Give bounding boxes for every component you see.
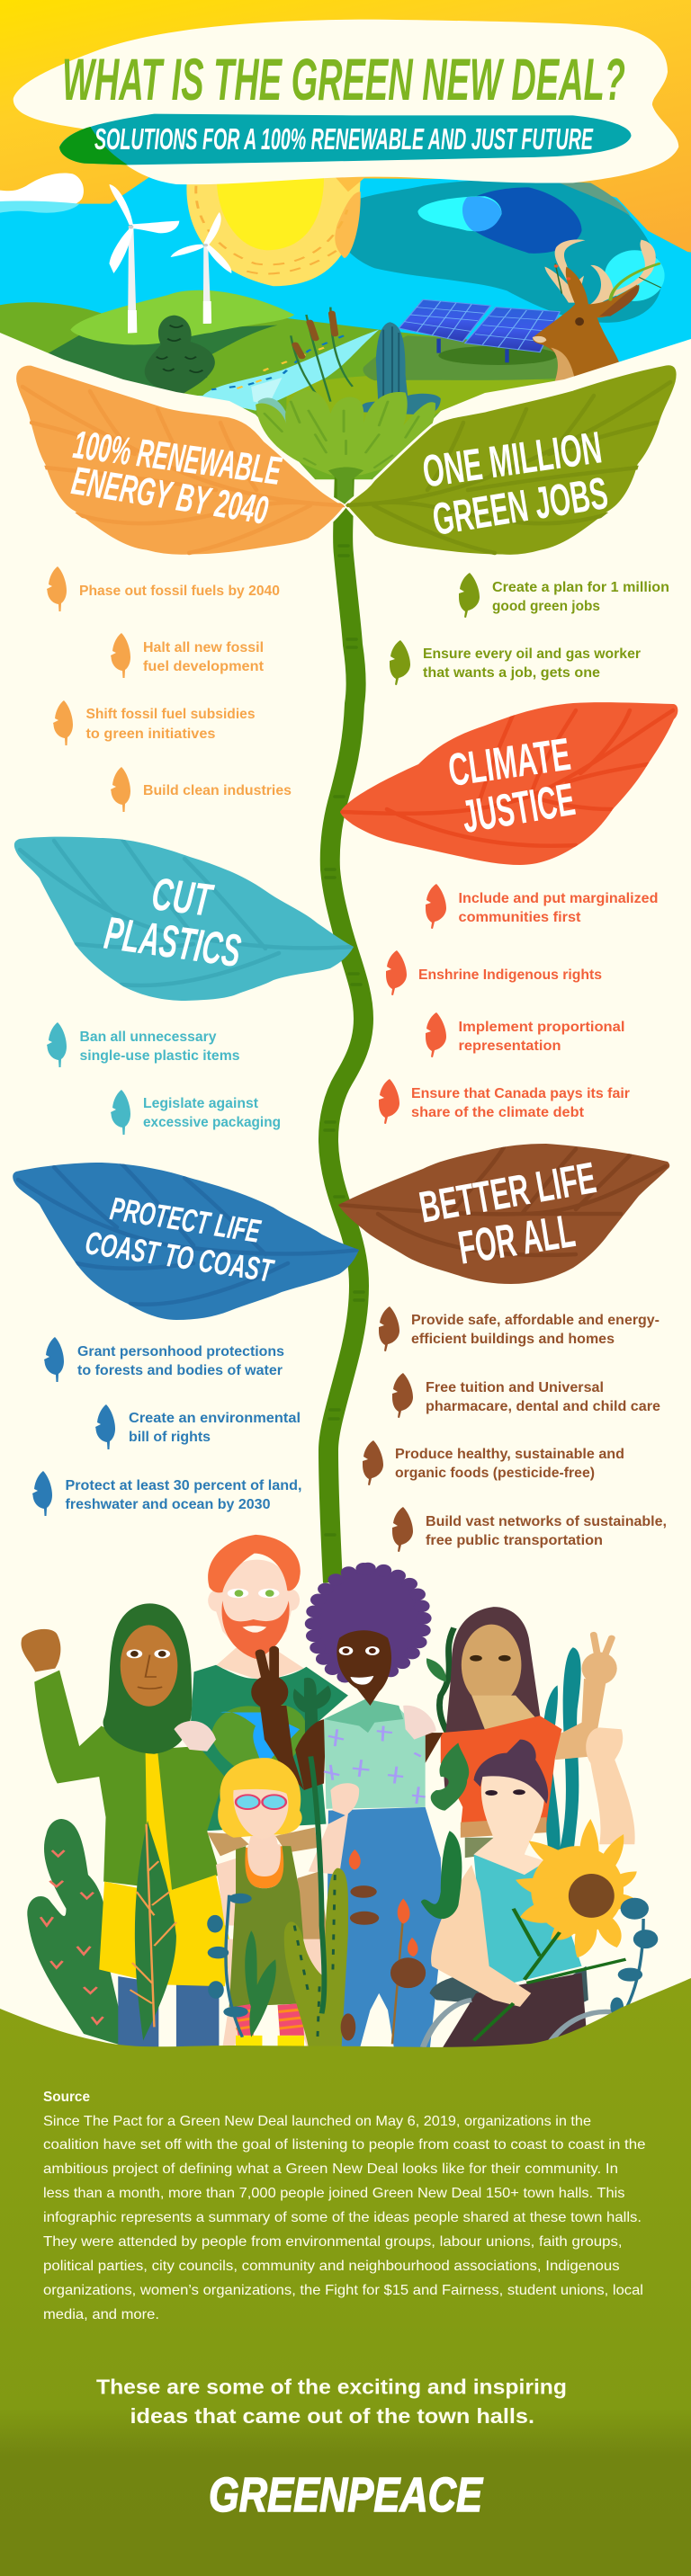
item: personhood protections: Grant personhood protections bbox=[77, 1344, 284, 1359]
people illustration bbox=[22, 1535, 658, 2051]
leaf: protect life coast to coast bbox=[13, 1163, 359, 1320]
item: shift subsidies: to green initiatives bbox=[86, 726, 216, 742]
item: plan for jobs bbox=[459, 573, 669, 618]
item: environmental bill of rights bbox=[95, 1404, 301, 1449]
item: tuition and pharmacare: Free tuition and Universal bbox=[426, 1380, 604, 1395]
heading: climate: CLIMATE bbox=[445, 728, 573, 796]
person: child with yellow hair bbox=[207, 1758, 359, 2051]
person: woman with purple afro bbox=[174, 1569, 443, 2051]
heading: energy by 2040: ENERGY BY 2040 bbox=[68, 459, 272, 533]
header illustration: sky, sun, hills, wind turbines, solar panels, deer bbox=[0, 0, 691, 479]
green field patch bbox=[363, 335, 569, 380]
cattails bbox=[291, 308, 353, 402]
source paragraph: coalition have set off with the goal of listening to people from coast to coast to coast in the bbox=[43, 2137, 646, 2153]
item: phase out fossil fuels: Phase out fossil fuels by 2040 bbox=[79, 584, 280, 599]
wind turbine 2 bbox=[171, 212, 231, 324]
item: buildings and homes: efficient buildings and homes bbox=[411, 1332, 615, 1347]
item: personhood protections: to forests and bodies of water bbox=[77, 1363, 283, 1378]
source paragraph bbox=[43, 2114, 646, 2322]
item: public transportation bbox=[392, 1507, 667, 1552]
item: public transportation: free public transportation bbox=[426, 1533, 603, 1548]
source paragraph: political parties, city councils, community and neighbourhood associations, Indigenous bbox=[43, 2259, 620, 2274]
item: organic foods bbox=[363, 1440, 624, 1485]
item: plan for jobs: Create a plan for 1 million bbox=[492, 580, 669, 595]
item: climate debt bbox=[379, 1079, 630, 1124]
list: renewable energy actions bbox=[47, 566, 292, 812]
item: phase out fossil fuels bbox=[47, 566, 280, 611]
heading: cut: CUT bbox=[149, 868, 217, 926]
teal cloud bbox=[337, 179, 661, 323]
list: better life actions bbox=[363, 1306, 667, 1552]
plant stem bbox=[325, 468, 363, 1582]
item: public transportation: Build vast networks of sustainable, bbox=[426, 1514, 667, 1529]
item: environmental bill of rights: bill of rights bbox=[129, 1430, 211, 1445]
item: protect 30 percent bbox=[32, 1471, 302, 1516]
source paragraph: They were attended by people from environmental groups, labour unions, faith groups, bbox=[43, 2234, 623, 2250]
item: oil and gas workers: that wants a job, gets one bbox=[423, 665, 600, 681]
item: clean industries: Build clean industries bbox=[143, 783, 292, 798]
source paragraph: less than a month, more than 7,000 people joined Green New Deal 150+ town halls. This bbox=[43, 2186, 625, 2201]
person: woman with long hair bbox=[441, 1607, 617, 1858]
closing statement bbox=[96, 2375, 567, 2428]
item: shift subsidies bbox=[53, 700, 256, 745]
list: cut plastics actions bbox=[47, 1022, 281, 1135]
list: green jobs actions bbox=[390, 573, 669, 685]
item: ban single-use: single-use plastic items bbox=[79, 1048, 239, 1064]
item: packaging: excessive packaging bbox=[143, 1115, 281, 1130]
closing statement: ideas that came out of the town halls. bbox=[130, 2404, 534, 2428]
leaf: 100% renewable energy bbox=[15, 364, 346, 556]
leaf: cut plastics bbox=[14, 837, 354, 1001]
item: environmental bill of rights: Create an environmental bbox=[129, 1411, 301, 1426]
heading: plastics: PLASTICS bbox=[102, 907, 244, 976]
item: buildings and homes bbox=[379, 1306, 660, 1351]
solar panels bbox=[399, 299, 560, 365]
source paragraph: media, and more. bbox=[43, 2307, 159, 2322]
subtitle banner bbox=[59, 114, 631, 165]
item: halt new fossil fuel: Halt all new fossil bbox=[143, 640, 264, 655]
cyan cloud bbox=[417, 196, 502, 231]
item: buildings and homes: Provide safe, affordable and energy- bbox=[411, 1313, 660, 1328]
lime field bbox=[286, 374, 564, 443]
wind turbine 1 bbox=[109, 184, 179, 334]
heading: 100% renewable: 100% RENEWABLE bbox=[71, 423, 284, 494]
leaf: better life for all bbox=[338, 1144, 669, 1284]
list: climate justice actions bbox=[379, 884, 659, 1124]
sunflower bbox=[474, 1819, 637, 2041]
item: oil and gas workers bbox=[390, 640, 641, 685]
cactus bbox=[361, 322, 441, 415]
item: protect 30 percent: Protect at least 30 percent of land, bbox=[65, 1478, 302, 1493]
source paragraph: organizations, women’s organizations, the Fight for $15 and Fairness, student unions, local bbox=[43, 2283, 643, 2298]
item: tuition and pharmacare bbox=[392, 1373, 660, 1418]
item: proportional representation: representation bbox=[459, 1038, 561, 1054]
item: packaging bbox=[111, 1090, 281, 1135]
item: ban single-use: Ban all unnecessary bbox=[79, 1030, 217, 1045]
flower bud bbox=[256, 389, 435, 504]
grey-green shade bbox=[555, 182, 630, 216]
item: marginalized communities: Include and put marginalized bbox=[459, 891, 659, 906]
plant: left cactus leaf bbox=[27, 1819, 128, 2047]
item: indigenous rights bbox=[386, 950, 602, 995]
deer bbox=[533, 239, 661, 387]
plant: climbing vine bbox=[426, 1627, 468, 1736]
item: proportional representation bbox=[426, 1012, 624, 1057]
base ground bbox=[0, 302, 617, 479]
Greenpeace logo: GREENPEACE bbox=[209, 2468, 484, 2522]
item: indigenous rights: Enshrine Indigenous rights bbox=[418, 967, 602, 983]
item: organic foods: organic foods (pesticide-free) bbox=[395, 1466, 595, 1481]
source text block bbox=[43, 2090, 646, 2322]
dark blue cloud bbox=[461, 187, 582, 254]
yellow sky background bbox=[0, 0, 691, 360]
person: man with red hair bbox=[190, 1535, 348, 1831]
item: climate debt: Ensure that Canada pays its fair bbox=[411, 1086, 630, 1101]
leaf: climate justice bbox=[340, 702, 678, 865]
person: woman in green hijab bbox=[22, 1603, 231, 2051]
item: proportional representation: Implement proportional bbox=[459, 1020, 624, 1035]
item: oil and gas workers: Ensure every oil and gas worker bbox=[423, 646, 641, 662]
item: tuition and pharmacare: pharmacare, dental and child care bbox=[426, 1399, 660, 1414]
list: protect life actions bbox=[32, 1337, 302, 1516]
source paragraph: ambitious project of defining what a Green New Deal looks like for their community. In bbox=[43, 2162, 618, 2177]
item: marginalized communities bbox=[426, 884, 659, 929]
blue sky bbox=[0, 177, 691, 389]
closing statement: These are some of the exciting and inspiring bbox=[96, 2375, 567, 2399]
plant: right blue sprig bbox=[610, 1898, 658, 2024]
plant: teal cacti bbox=[542, 1647, 581, 1858]
item: halt new fossil fuel: fuel development bbox=[143, 659, 264, 674]
cyan cloud by antlers bbox=[605, 250, 665, 301]
sun bbox=[186, 177, 366, 286]
river bbox=[185, 330, 379, 411]
green ground hill and footer background bbox=[0, 1978, 691, 2576]
item: climate debt: share of the climate debt bbox=[411, 1105, 584, 1120]
item: personhood protections bbox=[44, 1337, 284, 1382]
item: clean industries bbox=[111, 767, 292, 812]
item: packaging: Legislate against bbox=[143, 1096, 258, 1111]
item: ban single-use bbox=[47, 1022, 239, 1067]
item: plan for jobs: good green jobs bbox=[492, 599, 600, 614]
heading: coast to coast: COAST TO COAST bbox=[83, 1224, 277, 1289]
plant: cactus and sprigs foreground bbox=[130, 1743, 469, 2047]
leaf: one million green jobs bbox=[346, 364, 678, 556]
title blob bbox=[13, 20, 678, 184]
cream page area below the scene bbox=[0, 333, 691, 629]
source paragraph: infographic represents a summary of some of the ideas people shared at these town halls. bbox=[43, 2210, 642, 2225]
cloud overlap bbox=[462, 197, 501, 231]
person: woman in wheelchair bbox=[423, 1727, 635, 2051]
item: protect 30 percent: freshwater and ocean by 2030 bbox=[65, 1497, 270, 1512]
heading: protect life: PROTECT LIFE bbox=[108, 1190, 264, 1250]
left white cloud bbox=[0, 173, 84, 213]
item: shift subsidies: Shift fossil fuel subsidies bbox=[86, 707, 256, 722]
heading: for all: FOR ALL bbox=[455, 1205, 579, 1275]
source label: Source bbox=[43, 2090, 90, 2105]
item: halt new fossil fuel bbox=[111, 633, 264, 678]
light green hill bbox=[70, 290, 294, 344]
tree bbox=[145, 316, 215, 400]
dark green valley shade bbox=[48, 325, 278, 389]
source paragraph: Since The Pact for a Green New Deal launched on May 6, 2019, organizations in the bbox=[43, 2114, 591, 2129]
item: organic foods: Produce healthy, sustainable and bbox=[395, 1447, 624, 1462]
item: marginalized communities: communities first bbox=[459, 910, 581, 925]
heading: justice: JUSTICE bbox=[458, 773, 579, 842]
